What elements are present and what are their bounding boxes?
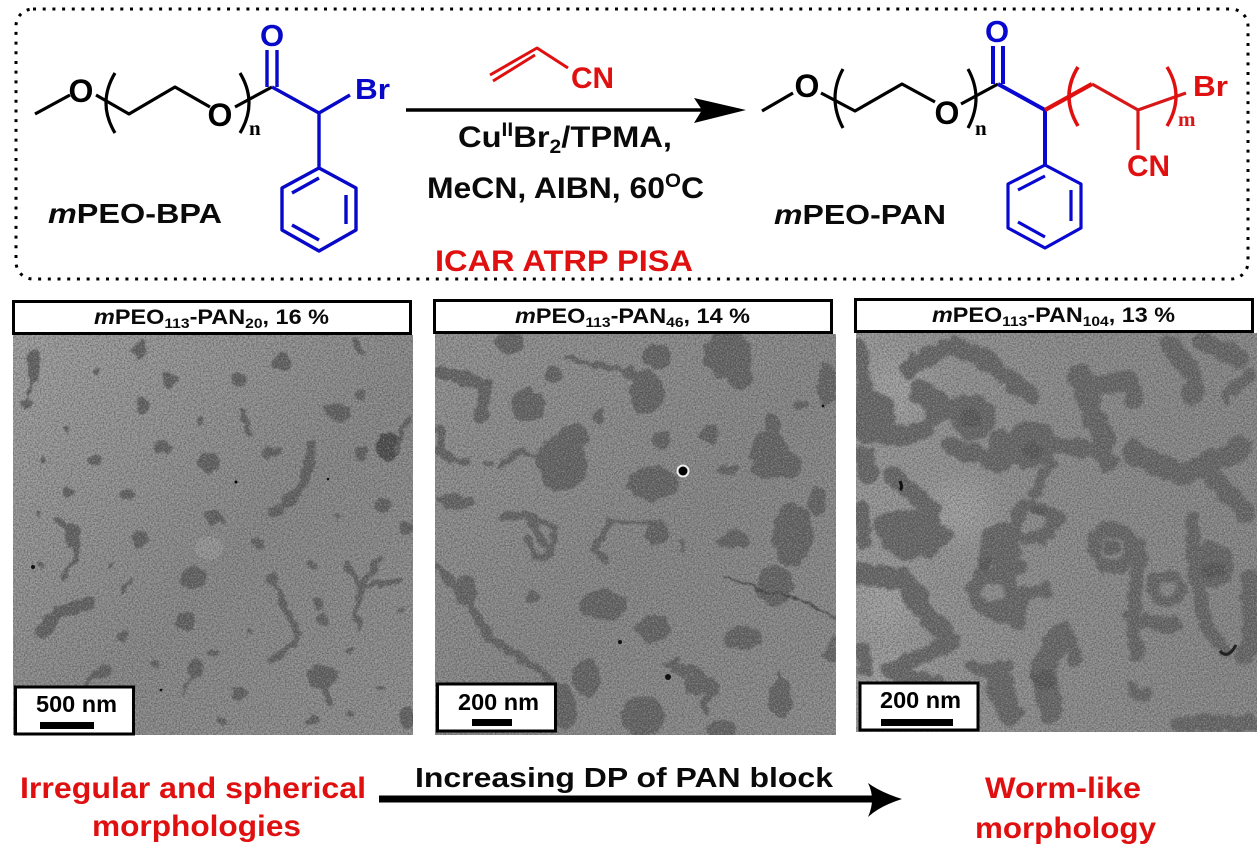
progression arrow <box>379 783 902 817</box>
conditions: solvent and temperature: O <box>665 171 681 192</box>
conditions: catalyst: Cu <box>458 121 497 154</box>
header: mPEO113-PAN104, 13 %: mPEO <box>932 304 997 327</box>
label: mPEO-BPA: mPEO-BPA <box>48 198 222 229</box>
caption: irregular and spherical morphologies <box>20 772 366 843</box>
structure: mPEO-BPA: O <box>208 97 232 133</box>
conditions: catalyst: Br <box>513 121 550 154</box>
structure: mPEO-BPA: O <box>69 73 93 109</box>
caption: irregular and spherical morphologies: Irregular and spherical <box>20 772 366 805</box>
reaction arrow <box>406 98 746 123</box>
structure: mPEO-PAN: O <box>985 14 1009 49</box>
structure: mPEO-PAN: Br <box>1193 71 1228 103</box>
structure: mPEO-PAN: m <box>1178 107 1196 131</box>
header: mPEO113-PAN104, 13 %: -PAN <box>1027 304 1083 327</box>
scale bar: 500 nm <box>16 687 134 734</box>
header: mPEO113-PAN20, 16 %: -PAN <box>190 306 245 329</box>
header: mPEO113-PAN46, 14 %: 46 <box>666 314 684 330</box>
caption: worm-like morphology: morphology <box>975 812 1156 845</box>
panel: TEM image mPEO113-PAN104 <box>856 300 1257 732</box>
conditions: solvent and temperature: C <box>681 172 704 205</box>
micrograph 2 <box>435 331 838 740</box>
structure: mPEO-BPA: O <box>260 18 284 53</box>
structure: mPEO-BPA <box>35 18 390 251</box>
conditions: catalyst: 2 <box>550 137 561 158</box>
header: mPEO113-PAN20, 16 %: , 16 % <box>263 306 329 329</box>
reagent: acrylonitrile <box>490 48 614 95</box>
dotted border <box>16 9 1248 279</box>
scale bar: 200 nm <box>860 683 978 730</box>
header: mPEO113-PAN46, 14 %: mPEO <box>515 305 580 328</box>
darker overlaps <box>961 409 1225 689</box>
header: mPEO113-PAN20, 16 %: 113 <box>164 315 190 331</box>
structure: mPEO-PAN: n <box>975 116 987 140</box>
scale bar: 500 nm: 500 nm <box>36 691 117 717</box>
conditions: catalyst: /TPMA, <box>561 121 672 154</box>
header: mPEO113-PAN46, 14 % <box>434 300 832 332</box>
caption: irregular and spherical morphologies: morphologies <box>92 810 301 843</box>
header: mPEO113-PAN104, 13 %: 104 <box>1083 313 1109 329</box>
conditions: solvent and temperature: MeCN, AIBN, 60 <box>427 172 647 205</box>
label: increasing DP of PAN block: Increasing DP of PAN block <box>415 762 833 793</box>
scale bar: 200 nm: 200 nm <box>880 687 961 713</box>
header: mPEO113-PAN20, 16 % <box>14 302 410 334</box>
structure: mPEO-PAN: O <box>935 95 959 131</box>
header: mPEO113-PAN46, 14 %: 113 <box>585 314 611 330</box>
micrograph 3 <box>856 333 1257 732</box>
structure: mPEO-BPA: n <box>249 116 261 140</box>
structure: mPEO-PAN: CN <box>1127 150 1170 183</box>
header: mPEO113-PAN20, 16 %: mPEO <box>94 306 159 329</box>
scale bar: 200 nm <box>438 684 556 731</box>
panel: TEM image mPEO113-PAN20 <box>13 302 415 735</box>
reagent: acrylonitrile: CN <box>571 62 614 95</box>
header: mPEO113-PAN104, 13 %: , 13 % <box>1109 304 1175 327</box>
header: mPEO113-PAN104, 13 %: 113 <box>1002 313 1028 329</box>
structure: mPEO-PAN <box>762 14 1228 248</box>
micrograph 1 <box>13 335 415 735</box>
panel: TEM image mPEO113-PAN46 <box>434 300 838 740</box>
reaction scheme panel <box>16 9 1248 279</box>
header: mPEO113-PAN104, 13 % <box>856 300 1252 332</box>
method title: ICAR ATRP PISA <box>435 245 693 278</box>
caption: worm-like morphology <box>975 772 1156 845</box>
scale bar: 200 nm: 200 nm <box>458 689 539 715</box>
structure: mPEO-PAN: O <box>795 68 819 104</box>
label: mPEO-PAN: mPEO-PAN <box>774 199 946 230</box>
conditions: catalyst: II <box>502 120 513 141</box>
header: mPEO113-PAN20, 16 %: 20 <box>245 315 263 331</box>
header: mPEO113-PAN46, 14 %: -PAN <box>611 305 666 328</box>
header: mPEO113-PAN46, 14 %: , 14 % <box>684 305 750 328</box>
caption: worm-like morphology: Worm-like <box>985 772 1141 805</box>
structure: mPEO-BPA: Br <box>355 74 390 106</box>
pale patch <box>195 536 223 560</box>
